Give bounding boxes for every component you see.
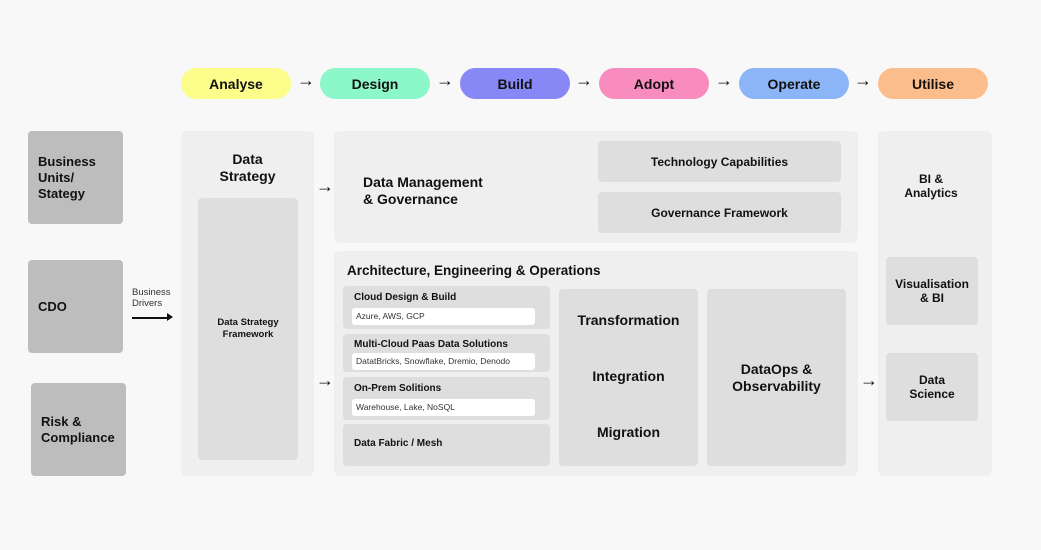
- Cloud Design: [343, 286, 550, 329]
- heading: & Governance: [363, 191, 458, 207]
- pill: Design: Design: [352, 76, 398, 92]
- panel: Data Management: [334, 131, 858, 243]
- heading: [363, 174, 483, 207]
- heading BI: Analytics: [904, 186, 958, 200]
- pill: Adopt: [599, 68, 709, 99]
- Multi-Cloud: Multi-Cloud Paas Data Solutions: [354, 339, 508, 350]
- left: CDO: CDO: [38, 298, 67, 314]
- heading: [219, 151, 276, 184]
- Visualisation: Visualisation: [895, 277, 969, 291]
- Transformation box: [559, 289, 698, 466]
- Data Science: Science: [909, 387, 955, 401]
- left: Risk: [31, 383, 126, 476]
- Transformation box: Transformation: [578, 312, 679, 328]
- arrow: →: [854, 70, 872, 90]
- pill: Analyse: [181, 68, 291, 99]
- Transformation box: Integration: [592, 368, 665, 384]
- arrow: →: [860, 370, 878, 390]
- framework box: Framework: [223, 329, 273, 340]
- framework box: Data Strategy: [217, 317, 279, 328]
- Visualisation: [886, 257, 978, 325]
- pill: Design: [320, 68, 430, 99]
- pill: Utilise: Utilise: [912, 76, 954, 92]
- arrow: →: [316, 370, 334, 390]
- arrow: →: [297, 70, 315, 90]
- On-Prem: On-Prem Solitions: [354, 383, 441, 394]
- pill: Utilise: [878, 68, 988, 99]
- pill: Operate: [739, 68, 849, 99]
- pill: Analyse: Analyse: [209, 76, 263, 92]
- heading BI: BI &: [919, 172, 943, 186]
- Data Science: Data: [919, 373, 945, 387]
- pill: Operate: Operate: [768, 76, 820, 92]
- panel: AEO: [334, 251, 858, 476]
- pill: Adopt: Adopt: [634, 76, 674, 92]
- arrow: →: [436, 70, 454, 90]
- Multi-Cloud: [343, 334, 550, 372]
- Visualisation: & BI: [920, 291, 944, 305]
- arrow: →: [316, 176, 334, 196]
- business drivers arrow: Business Drivers: [132, 287, 171, 309]
- left: Risk: Risk &: [41, 414, 81, 428]
- DataOps box: Observability: [732, 378, 821, 394]
- heading: Data Management: [363, 174, 483, 190]
- Cloud Design: Cloud Design & Build: [354, 292, 456, 303]
- pill: Build: Build: [498, 76, 532, 92]
- heading: Strategy: [219, 168, 276, 184]
- Governance Framework: Governance Framework: [651, 206, 788, 220]
- arrow: →: [575, 70, 593, 90]
- Data Fabric: Data Fabric / Mesh: [354, 438, 442, 449]
- left: Business Units: [28, 131, 123, 224]
- On-Prem: [343, 377, 550, 420]
- Governance Framework: [598, 192, 841, 233]
- business drivers arrow: [132, 287, 173, 321]
- panel: Data Strategy: [181, 131, 314, 476]
- panel: right: [878, 131, 992, 476]
- Data Science: [886, 353, 978, 421]
- DataOps box: DataOps &: [741, 360, 812, 376]
- Technology Capabilities: [598, 141, 841, 182]
- left: Business Units: Units/: [38, 170, 74, 184]
- pill: Build: [460, 68, 570, 99]
- Data Fabric: [343, 424, 550, 466]
- left: Business Units: Business: [38, 154, 96, 168]
- Technology Capabilities: Technology Capabilities: [651, 154, 788, 168]
- On-Prem: Warehouse, Lake, NoSQL: [356, 402, 455, 412]
- left: CDO: [28, 260, 123, 353]
- left: Business Units: Stategy: [38, 186, 85, 200]
- DataOps box: [707, 289, 846, 466]
- Transformation box: Migration: [597, 424, 660, 440]
- left: Risk: Compliance: [41, 430, 115, 444]
- Cloud Design: Azure, AWS, GCP: [356, 311, 425, 321]
- framework box: [198, 198, 298, 460]
- Multi-Cloud: DatatBricks, Snowflake, Dremio, Denodo: [356, 356, 510, 366]
- heading AEO: Architecture, Engineering & Operations: [347, 263, 601, 278]
- heading BI: [904, 172, 958, 200]
- heading: Data: [232, 151, 263, 167]
- arrow: →: [715, 70, 733, 90]
